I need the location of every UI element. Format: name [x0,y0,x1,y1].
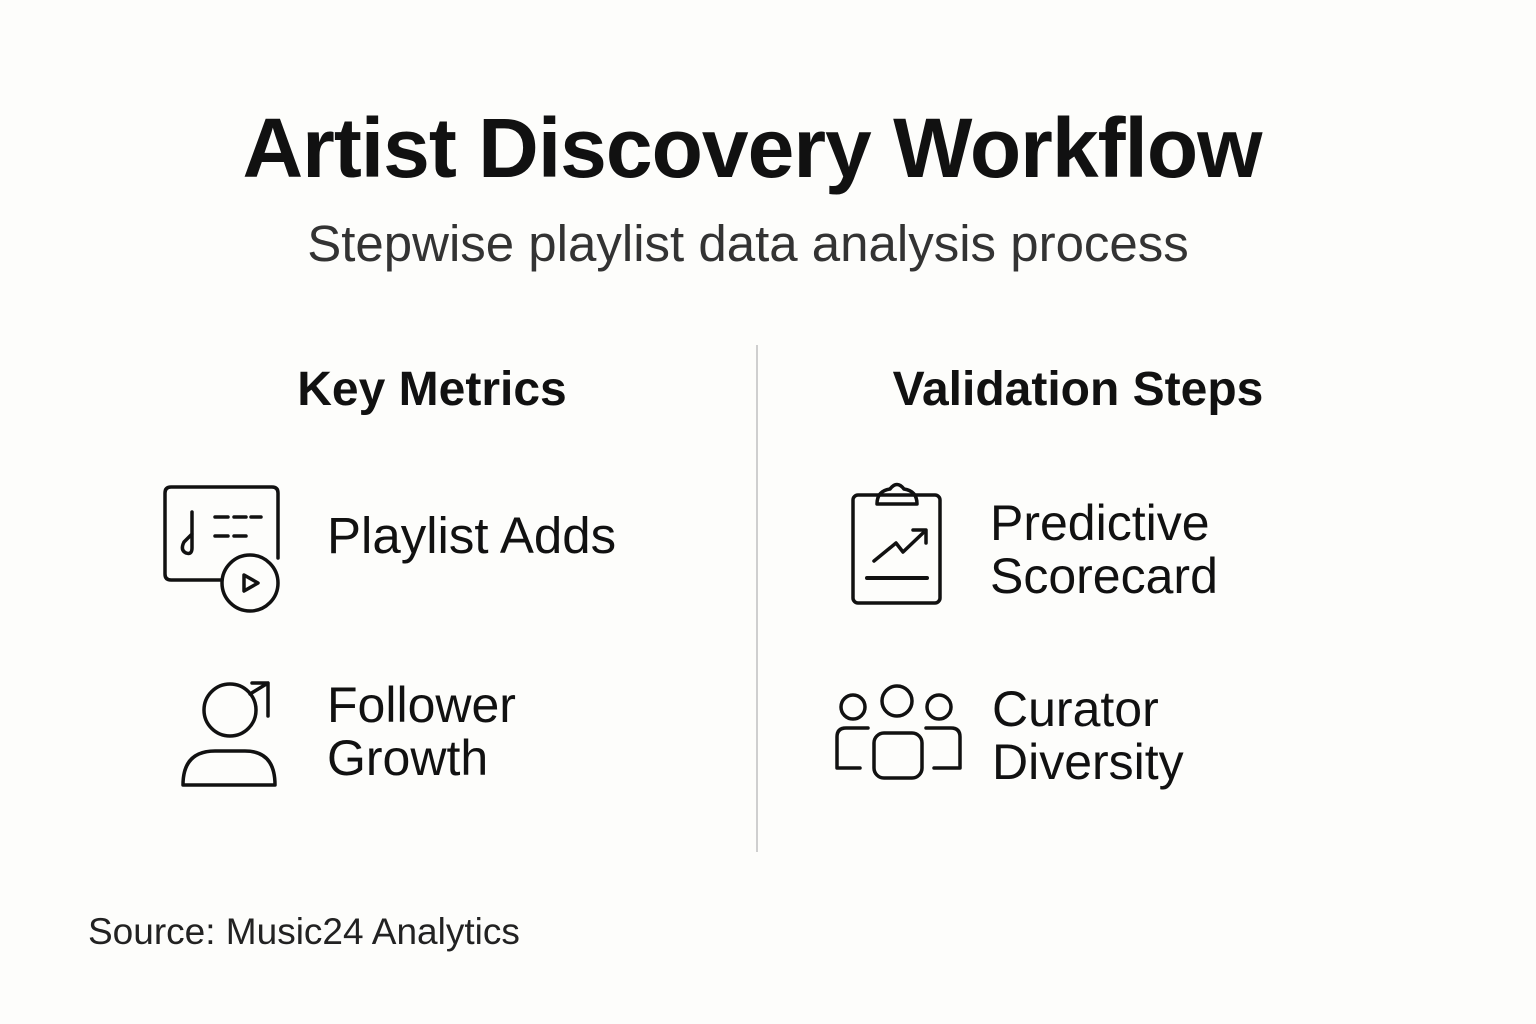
text: follower growth: Growth [327,730,488,786]
text: playlist adds: Playlist Adds [327,507,616,564]
text: curator diversity: Diversity [992,734,1184,790]
text: predictive scorecard: Predictive [990,495,1210,551]
text: follower growth: Follower [327,677,516,733]
subtitle: Stepwise playlist data analysis process [307,215,1189,272]
text: curator diversity [992,681,1184,790]
text: follower growth [327,677,516,786]
heading: validation steps: Validation Steps [893,363,1263,416]
source: Source: Music24 Analytics [88,911,520,952]
text: predictive scorecard: Scorecard [990,548,1218,604]
text: predictive scorecard [990,495,1218,604]
heading: key metrics: Key Metrics [297,363,567,416]
text: curator diversity: Curator [992,681,1159,737]
title: Artist Discovery Workflow [242,101,1262,195]
